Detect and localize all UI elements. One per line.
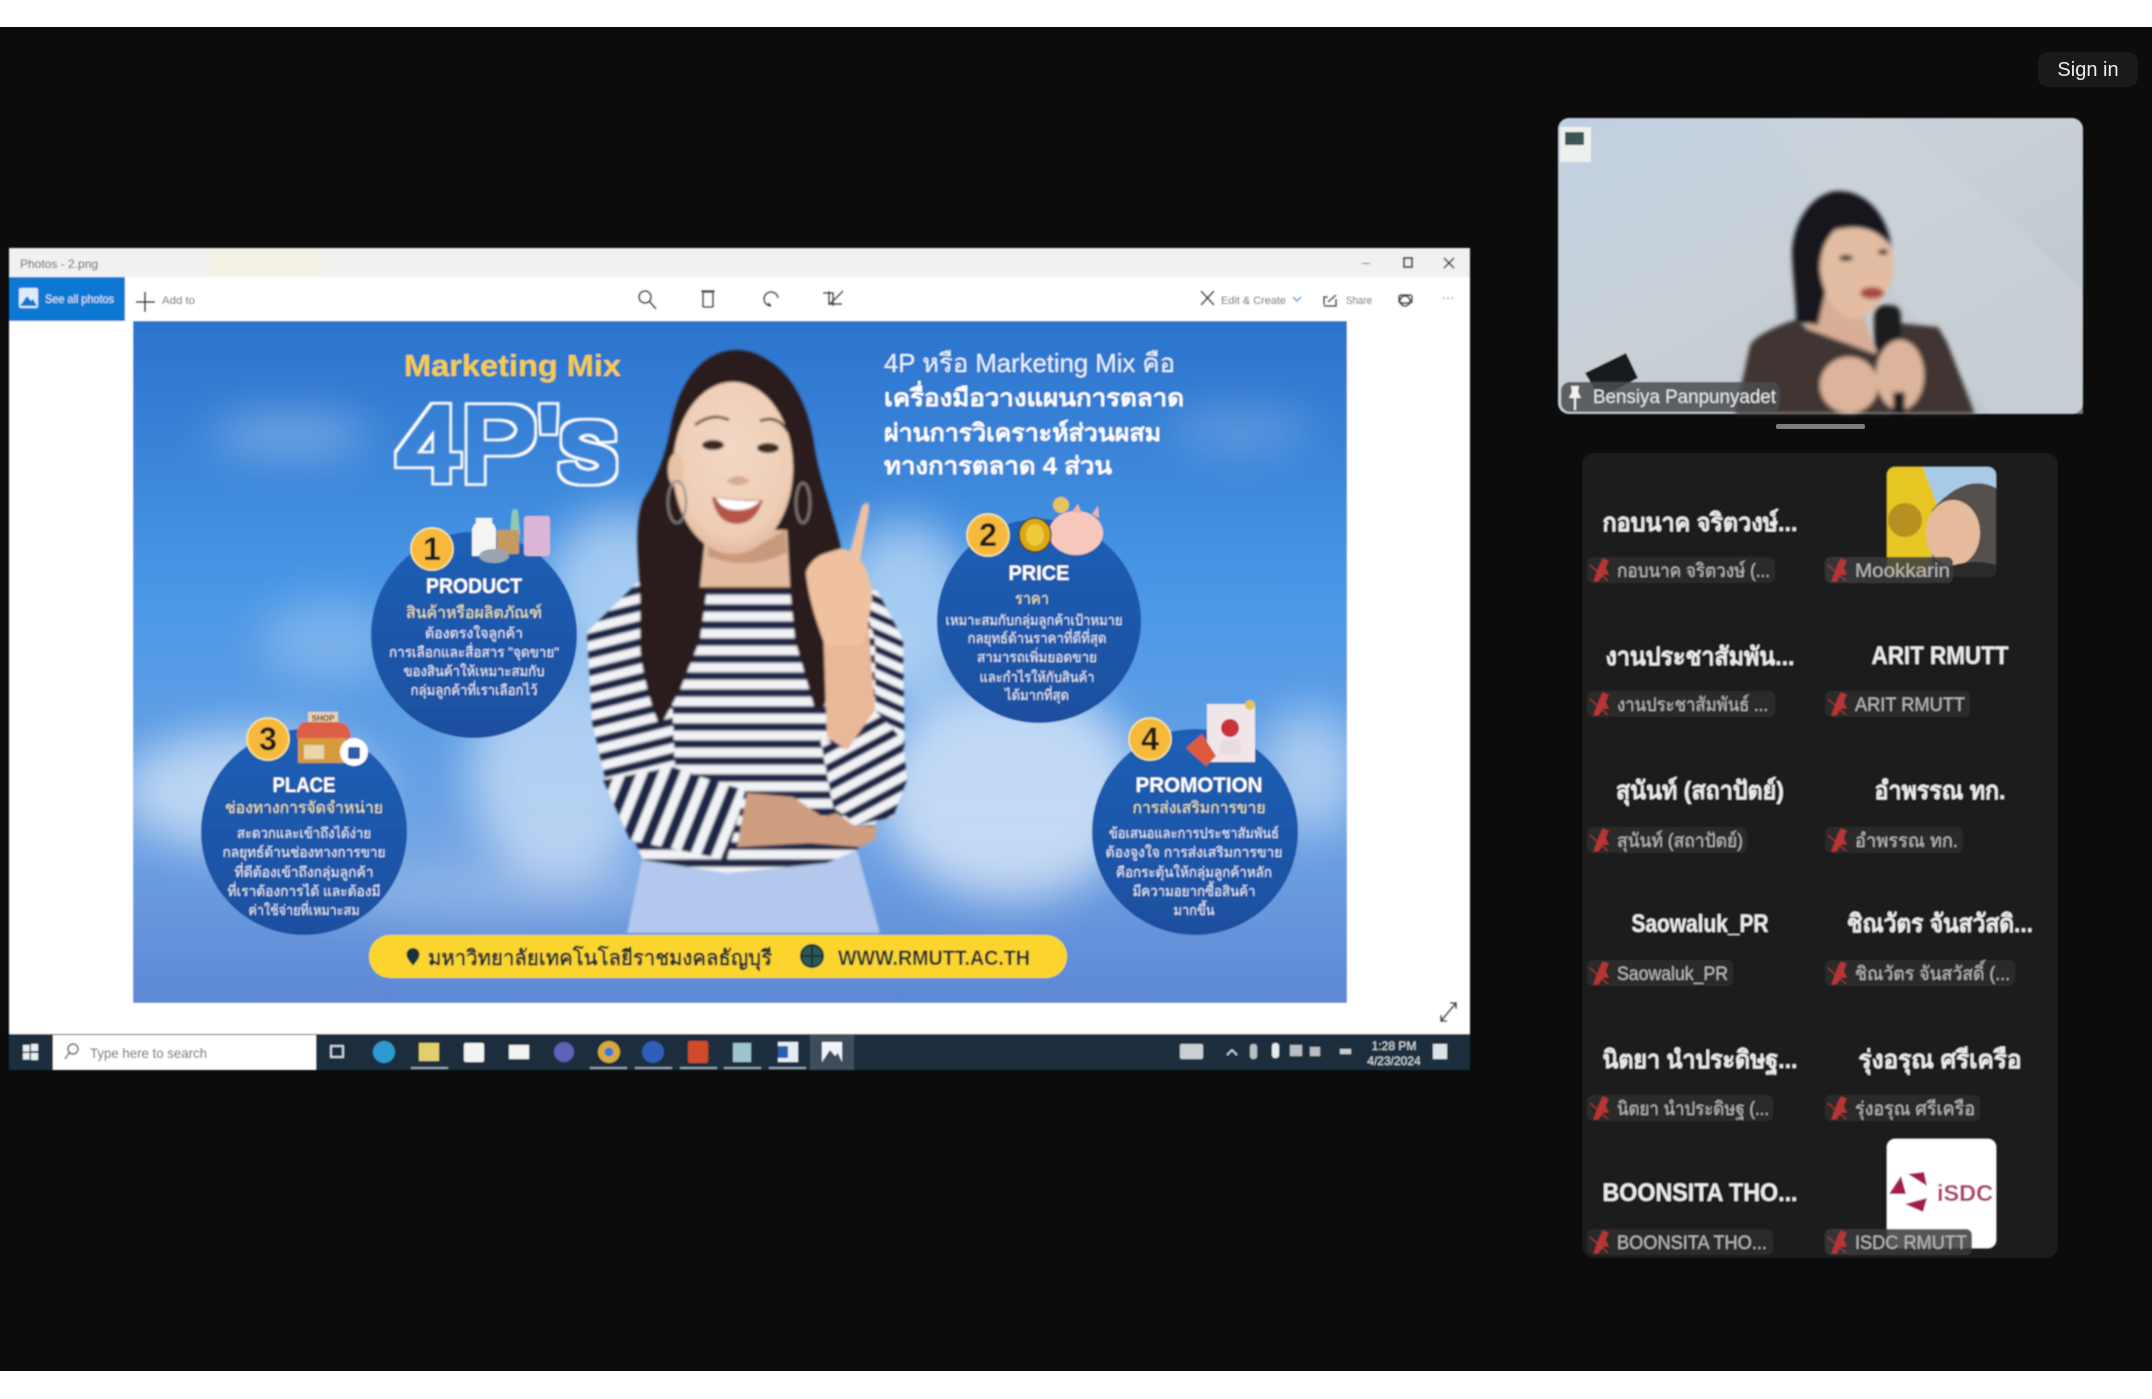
right sleeve cuff [820, 710, 907, 825]
toolbar icons [639, 291, 1412, 309]
hands [1820, 340, 1924, 413]
participant: row 5 right: รุ่งอรุณ ศรีเครือ [1855, 1098, 1975, 1121]
title: PROMOTION [1136, 774, 1262, 797]
description: คือกระตุ้นให้กลุ่มลูกค้าหลัก [1116, 864, 1272, 881]
description: ราคา [1015, 591, 1049, 608]
pointing hand [806, 503, 872, 645]
right upper sleeve [860, 590, 903, 740]
trousers [627, 850, 880, 933]
description: ที่เราต้องการได้ และต้องมี [228, 882, 380, 899]
participant: row 5 right: รุ่งอรุณ ศรีเครือ [1858, 1046, 2022, 1076]
description: ของสินค้าให้เหมาะสมกับ [404, 663, 544, 679]
panel: 1 product [371, 509, 577, 738]
panel: 3 place [201, 712, 407, 935]
wall light streak [1760, 118, 2083, 414]
button: see all photos [9, 277, 125, 321]
taskbar app icons [331, 1034, 854, 1070]
participant: row 2 right [1825, 642, 2008, 717]
participant: row 4 left [1587, 910, 1768, 986]
face [1820, 228, 1894, 319]
participant: row 1 left [1587, 508, 1798, 583]
nose [726, 476, 750, 486]
text block: definition of 4P: ผ่านการวิเคราะห์ส่วนผสม [884, 419, 1161, 447]
title bar: Photos - 2.png [20, 257, 98, 271]
expand arrow icon [1441, 1003, 1456, 1021]
description: ช่องทางการจัดจำหน่าย [225, 800, 383, 817]
mouth [1860, 287, 1884, 299]
title: PLACE [272, 774, 336, 797]
eyes [702, 440, 779, 453]
participant: row 3 right: อำพรรณ ทก. [1874, 777, 2006, 805]
toolbar labels: Edit & Create [1221, 295, 1286, 307]
badge: number 2 [967, 514, 1009, 556]
sky clouds [120, 410, 1360, 920]
text block: definition of 4P [884, 348, 1184, 480]
participant: row 4 right [1825, 910, 2033, 986]
description: ข้อเสนอและการประชาสัมพันธ์ [1109, 825, 1279, 841]
description: และกำไรให้กับสินค้า [980, 669, 1094, 685]
eyebrows [695, 417, 788, 432]
hair [637, 350, 846, 727]
description: การส่งเสริมการขาย [1132, 800, 1266, 817]
participant: row 2 right: ARIT RMUTT [1855, 695, 1965, 716]
participant: row 6 left: BOONSITA THO... [1617, 1233, 1767, 1254]
icon: globe [801, 945, 823, 967]
left ear [668, 453, 684, 487]
microphone handle [1893, 392, 1905, 414]
participant: row 4 right: ชิณวัตร จันสวัสดิ์ (... [1855, 959, 2010, 985]
title bar: – [1362, 254, 1370, 270]
icon: location pin [406, 948, 420, 966]
participant: row 1 left: กอบนาค จริตวงษ์... [1602, 508, 1798, 537]
participant: row 3 right: อำพรรณ ทก. [1855, 831, 1958, 852]
hair [1792, 191, 1892, 325]
window body [9, 248, 1470, 1034]
bottom white strip [0, 1371, 2152, 1399]
avatar: iSDC logo [1887, 1139, 1996, 1248]
icon: shop [297, 712, 368, 766]
heading: Marketing Mix: Marketing Mix [404, 348, 622, 383]
participant: row 4 left: Saowaluk_PR [1617, 964, 1728, 985]
text block: definition of 4P: ทางการตลาด 4 ส่วน [884, 453, 1113, 480]
left upper sleeve [587, 583, 675, 782]
description: มีความอยากซื้อสินค้า [1132, 881, 1256, 899]
participant: row 6 right [1825, 1229, 1972, 1255]
system tray: 4/23/2024 [1367, 1054, 1421, 1068]
description [1106, 800, 1282, 918]
icon: shop: SHOP [312, 714, 335, 723]
badge: number 4 [1129, 718, 1171, 760]
search box [53, 1035, 316, 1070]
wall thermostat [1560, 127, 1591, 162]
button: add to: Add to [162, 295, 195, 307]
participant: row 2 left [1587, 643, 1794, 717]
panel: participant gallery [1582, 453, 2058, 1258]
participant: row 6 left [1587, 1179, 1798, 1255]
participant: row 5 left [1587, 1046, 1798, 1121]
left sleeve cuff [603, 767, 745, 860]
panel: shared screen Photos window [9, 248, 1470, 1070]
dress [1735, 320, 1975, 414]
title bar [9, 248, 1470, 277]
participant: row 5 left: นิตยา นำประดิษฐ... [1602, 1046, 1798, 1076]
description: ที่ดีต้องเข้าถึงกลุ่มลูกค้า [234, 863, 374, 881]
participant: row 1 right: Mookkarin [1855, 561, 1950, 582]
badge: number 3 [247, 718, 289, 760]
participant: row 2 left: งานประชาสัมพัน... [1606, 643, 1794, 671]
participant: row 1 right [1825, 557, 1953, 583]
participant: row 2 right: ARIT RMUTT [1872, 642, 2008, 670]
neck [700, 530, 790, 587]
folded forearm [737, 793, 877, 847]
badge: number 1 [411, 528, 453, 570]
title: PRICE [1008, 562, 1070, 585]
name tag [1561, 382, 1780, 412]
heading: 4P's outlined: 4P's [397, 386, 617, 503]
system tray: 1:28 PM [1372, 1039, 1416, 1053]
description: ค่าใช้จ่ายที่เหมาะสม [248, 901, 360, 918]
icon: product items [472, 509, 550, 563]
active app underlines [411, 1067, 806, 1069]
description [946, 591, 1122, 704]
toolbar labels: Share [1346, 295, 1372, 307]
panel: poster [120, 321, 1360, 1003]
speaker figure [1735, 191, 1975, 414]
toolbar labels [1221, 290, 1454, 307]
scroll indicator [1776, 424, 1865, 429]
neck [1805, 295, 1876, 354]
text block: definition of 4P: เครื่องมือวางแผนการตลาด [884, 380, 1184, 412]
participant: row 3 left: สุนันท์ (สถาปัตย์) [1616, 776, 1784, 807]
description: เหมาะสมกับกลุ่มลูกค้าเป้าหมาย [946, 612, 1122, 629]
description: ต้องตรงใจลูกค้า [425, 625, 523, 642]
participant: row 1 left: กอบนาค จริตวงษ์ (... [1617, 560, 1770, 582]
participant: row 4 left: Saowaluk_PR [1632, 910, 1768, 938]
avatar: Mookkarin photo [1887, 467, 1996, 577]
text block: definition of 4P: 4P หรือ Marketing Mix คือ [884, 348, 1175, 378]
button: add to [136, 292, 195, 312]
participant: row 3 right [1825, 777, 2006, 853]
description [222, 800, 386, 918]
avatar: iSDC logo: iSDC [1937, 1180, 1993, 1206]
description: การเลือกและสื่อสาร "จุดขาย" [389, 643, 559, 661]
participant: row 4 right: ชิณวัตร จันสวัสดิ... [1847, 910, 2033, 938]
participant: row 5 right [1825, 1046, 2022, 1121]
participant: row 2 left: งานประชาสัมพันธ์ ... [1617, 694, 1768, 716]
description: กลยุทธ์ด้านราคาที่ดีที่สุด [968, 629, 1106, 647]
striped shirt torso [587, 583, 905, 873]
participant: row 3 left [1587, 776, 1784, 853]
search box: Type here to search [90, 1045, 207, 1061]
badge: number 3: 3 [259, 721, 277, 757]
description: ต้องจูงใจ การส่งเสริมการขาย [1106, 844, 1282, 861]
toolbar labels: ··· [1442, 290, 1454, 305]
description: สินค้าหรือผลิตภัณฑ์ [406, 603, 542, 622]
panel: 4 promotion [1092, 700, 1298, 935]
description: ได้มากที่สุด [1004, 686, 1069, 704]
description: กลุ่มลูกค้าที่เราเลือกไว้ [410, 681, 538, 699]
website: WWW.RMUTT.AC.TH [838, 947, 1030, 970]
footer address pill [369, 935, 1067, 978]
raised forearm [823, 620, 875, 750]
button: see all photos: See all photos [45, 292, 114, 306]
panel: 2 price [937, 497, 1141, 723]
description: มากขึ้น [1174, 900, 1215, 918]
participant: row 5 left: นิตยา นำประดิษฐ (... [1617, 1099, 1769, 1120]
description: สะดวกและเข้าถึงได้ง่าย [237, 825, 371, 841]
illustration: smiling woman pointing up [587, 350, 907, 933]
laptop corner [1585, 353, 1638, 398]
start button [23, 1044, 38, 1060]
description: กลยุทธ์ด้านช่องทางการขาย [222, 844, 386, 861]
title: PRODUCT [426, 575, 522, 598]
name tag: Bensiya Panpunyadet [1593, 387, 1777, 408]
sign in button [2038, 52, 2138, 87]
description: สามารถเพิ่มยอดขาย [977, 648, 1097, 665]
sign in button: Sign in [2057, 59, 2119, 81]
description [389, 603, 559, 699]
panel: speaker video [1558, 118, 2083, 414]
badge: number 4: 4 [1141, 721, 1159, 757]
participant: row 6 right: ISDC RMUTT [1855, 1233, 1967, 1254]
participant: row 3 left: สุนันท์ (สถาปัตย์) [1617, 830, 1743, 853]
microphone [1874, 305, 1901, 353]
university name: มหาวิทยาลัยเทคโนโลยีราชมงคลธัญบุรี [428, 945, 773, 972]
chin shadow [708, 530, 787, 563]
icon: piggy bank and coin [1019, 497, 1103, 555]
system tray [1180, 1039, 1447, 1068]
face [673, 382, 793, 554]
participant: row 6 left: BOONSITA THO... [1602, 1179, 1798, 1207]
mouth [712, 497, 763, 524]
taskbar [9, 1034, 1470, 1070]
badge: number 2: 2 [979, 517, 997, 553]
top white strip [0, 0, 2152, 27]
badge: number 1: 1 [423, 531, 441, 567]
eyes [1839, 249, 1888, 261]
icon: promotion board [1186, 700, 1255, 766]
hoop earrings [668, 481, 810, 523]
